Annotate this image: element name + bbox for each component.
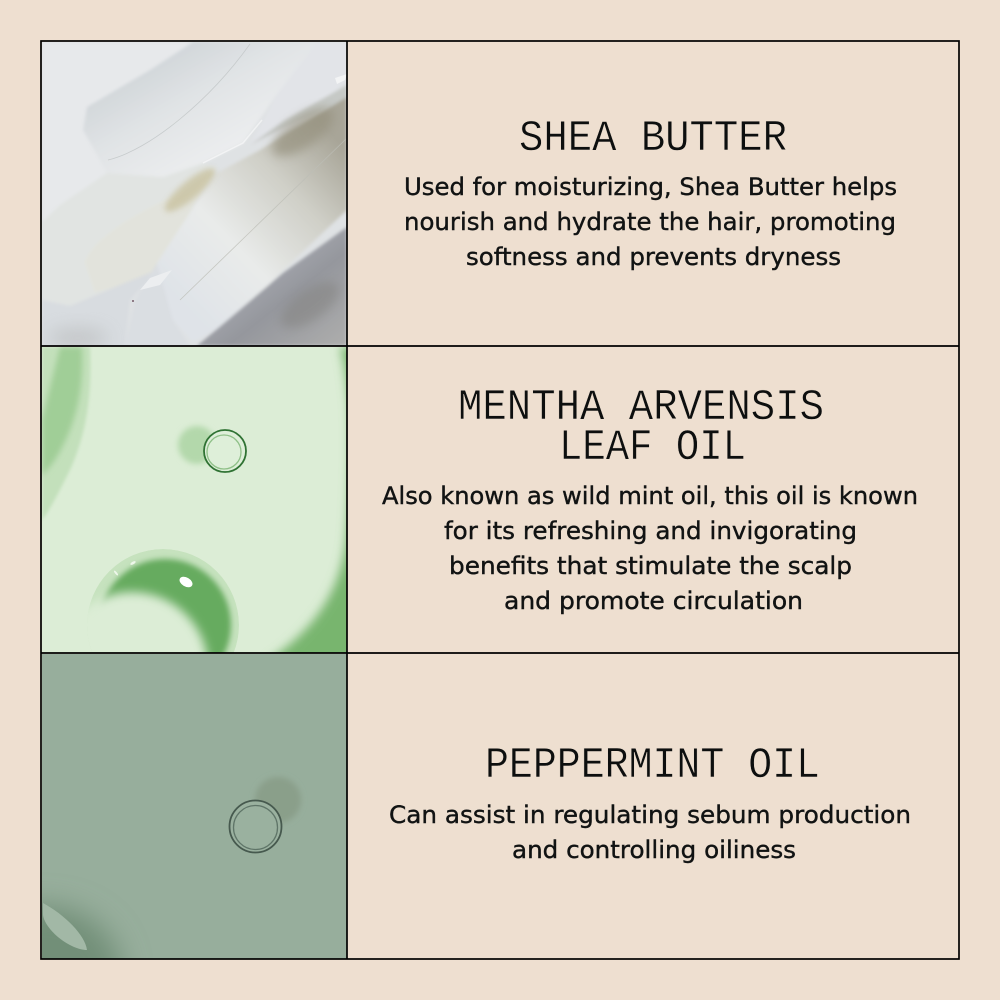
large oil pool rim [270, 347, 346, 652]
text block: mentha arvensis leaf oil [382, 383, 918, 615]
panel: mentha oil photo [42, 347, 346, 652]
heading: peppermint oil: PEPPERMINT OIL [485, 741, 820, 791]
heading: mentha arvensis leaf oil [458, 383, 824, 473]
description: mentha arvensis leaf oil [382, 482, 918, 615]
small droplet with shadow [178, 426, 246, 472]
corner highlight [43, 903, 87, 950]
panel: peppermint oil photo [42, 654, 346, 958]
description: mentha arvensis leaf oil: Also known as wild mint oil, this oil is known [382, 482, 918, 510]
butter shadows and highlights [48, 44, 347, 348]
droplet shadow [255, 777, 301, 823]
description: shea butter: nourish and hydrate the hair, promoting [404, 208, 896, 236]
description: shea butter: Used for moisturizing, Shea Butter helps [404, 173, 897, 201]
heading: mentha arvensis leaf oil: LEAF OIL [559, 423, 746, 473]
text block: peppermint oil [389, 741, 911, 864]
description: peppermint oil [389, 801, 911, 864]
droplet ring [230, 800, 282, 852]
text block: shea butter [404, 114, 897, 271]
left crescent [42, 347, 90, 520]
description: peppermint oil: Can assist in regulating sebum production [389, 801, 911, 829]
corner shadow [42, 896, 129, 958]
heading: shea butter: SHEA BUTTER [519, 114, 787, 164]
description: mentha arvensis leaf oil: for its refreshing and invigorating [444, 517, 857, 545]
large droplet [90, 549, 239, 652]
heading: mentha arvensis leaf oil: MENTHA ARVENSIS [458, 383, 824, 433]
description: shea butter: softness and prevents dryness [466, 243, 841, 271]
description: mentha arvensis leaf oil: benefits that stimulate the scalp [449, 552, 852, 580]
panel: shea butter photo [42, 42, 347, 348]
description: peppermint oil: and controlling oiliness [512, 836, 796, 864]
description: mentha arvensis leaf oil: and promote circulation [504, 587, 803, 615]
description: shea butter [404, 173, 897, 271]
